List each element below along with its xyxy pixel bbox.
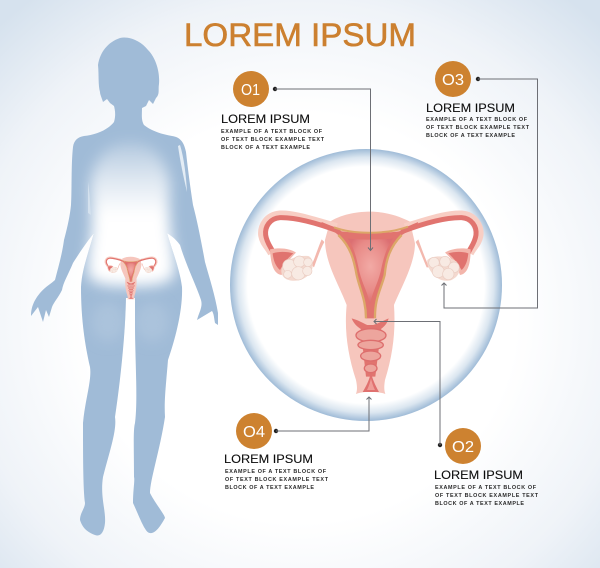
- small organ on body: [106, 257, 157, 300]
- text block 02: BLOCK OF A TEXT EXAMPLE: [435, 501, 524, 507]
- text block 03: OF TEXT BLOCK EXAMPLE TEXT: [426, 125, 530, 131]
- text block 01: BLOCK OF A TEXT EXAMPLE: [221, 145, 310, 151]
- heading 02: LOREM IPSUM: [434, 468, 523, 482]
- badge 04: O4: [243, 424, 265, 441]
- text block 01: [221, 129, 325, 151]
- large reproductive organ illustration: [262, 212, 479, 394]
- badge 01: O1: [241, 82, 260, 99]
- connector 04: [274, 397, 372, 433]
- text block 01: EXAMPLE OF A TEXT BLOCK OF: [221, 129, 323, 135]
- heading 03: LOREM IPSUM: [426, 101, 515, 115]
- block 02: [434, 428, 539, 507]
- text block 04: BLOCK OF A TEXT EXAMPLE: [225, 485, 314, 491]
- text block 04: EXAMPLE OF A TEXT BLOCK OF: [225, 469, 327, 475]
- text block 02: [435, 485, 539, 507]
- block 01: [221, 71, 325, 151]
- heading 04: LOREM IPSUM: [224, 452, 313, 466]
- connector 01: [273, 87, 373, 250]
- text block 03: BLOCK OF A TEXT EXAMPLE: [426, 133, 515, 139]
- magnifier circle: [230, 149, 502, 421]
- badge 03: O3: [442, 72, 464, 89]
- text block 02: EXAMPLE OF A TEXT BLOCK OF: [435, 485, 537, 491]
- text block 03: EXAMPLE OF A TEXT BLOCK OF: [426, 117, 528, 123]
- title: LOREM IPSUM: [184, 17, 416, 53]
- text block 04: OF TEXT BLOCK EXAMPLE TEXT: [225, 477, 329, 483]
- connector 02: [374, 319, 442, 447]
- badge 02: O2: [452, 439, 474, 456]
- text block 04: [225, 469, 329, 491]
- text block 03: [426, 117, 530, 139]
- text block 01: OF TEXT BLOCK EXAMPLE TEXT: [221, 137, 325, 143]
- woman body silhouette: [31, 38, 218, 536]
- block 03: [426, 61, 530, 139]
- heading 01: LOREM IPSUM: [221, 112, 310, 126]
- connector 03: [442, 77, 538, 308]
- text block 02: OF TEXT BLOCK EXAMPLE TEXT: [435, 493, 539, 499]
- block 04: [224, 413, 329, 491]
